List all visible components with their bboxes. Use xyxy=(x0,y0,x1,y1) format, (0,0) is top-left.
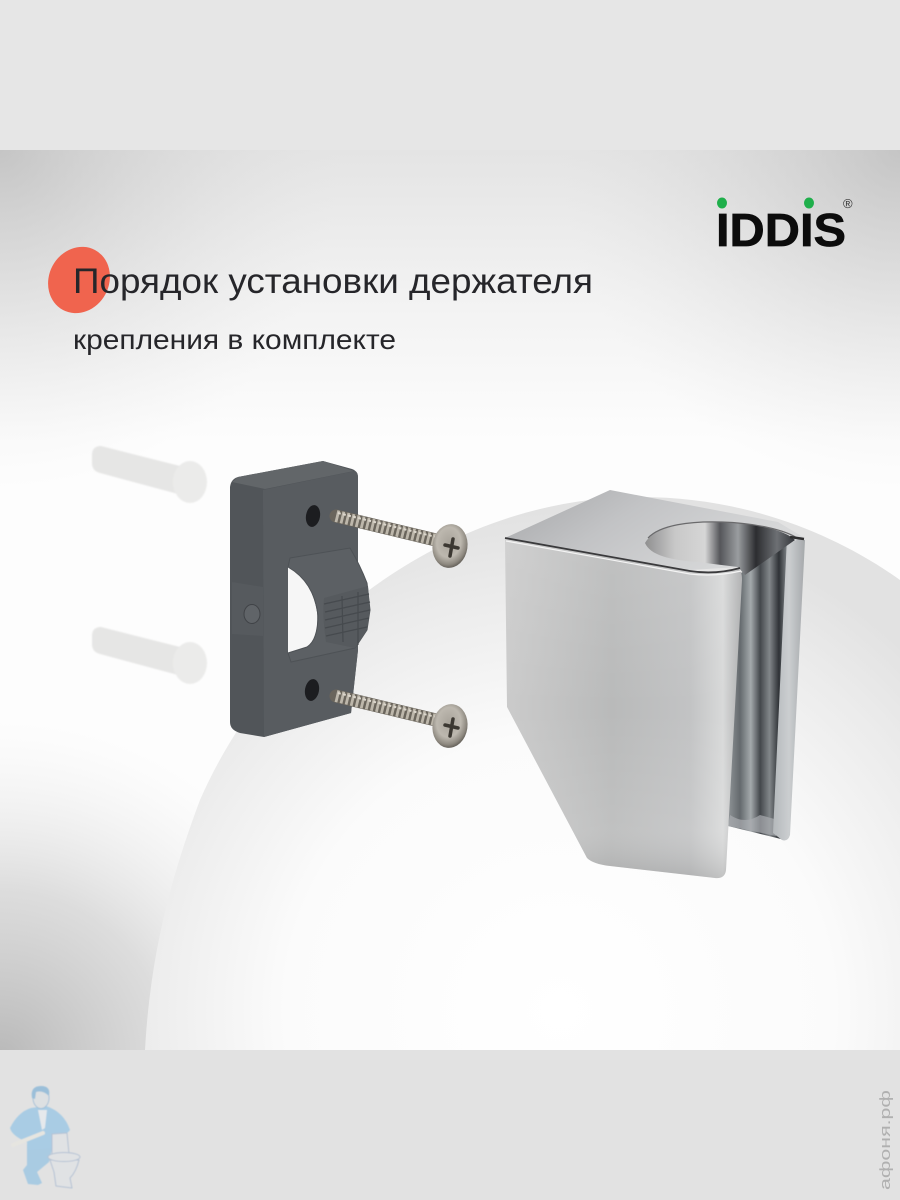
screw: upper xyxy=(336,513,470,570)
holder inner channel xyxy=(728,538,795,840)
mascot hair xyxy=(32,1086,49,1099)
logo: IDDIS: IDDIS xyxy=(716,204,846,256)
bracket clip xyxy=(288,548,370,662)
bracket front face xyxy=(263,471,358,737)
mascot shirt xyxy=(38,1110,47,1130)
wall plug: lower xyxy=(92,627,207,684)
top grey band xyxy=(0,0,900,150)
holder right strip xyxy=(773,537,805,840)
mascot wrench xyxy=(13,1133,43,1145)
mascot jacket xyxy=(10,1106,70,1150)
bracket side pin xyxy=(244,604,260,624)
mascot legs xyxy=(23,1140,54,1185)
screw: lower xyxy=(336,693,470,750)
mascot toilet xyxy=(48,1133,80,1188)
mascot: plumber with toilet xyxy=(10,1086,80,1188)
wall plug: upper xyxy=(92,446,207,503)
holder socket xyxy=(645,522,795,575)
screw hole: lower xyxy=(303,678,321,702)
chrome shower holder xyxy=(505,490,805,878)
central background panel xyxy=(0,150,900,1050)
holder front face xyxy=(505,538,742,878)
large light arc xyxy=(145,497,900,1050)
bracket top face xyxy=(232,461,354,489)
accent blob behind heading xyxy=(37,236,121,324)
subheading: крепления в комплекте xyxy=(73,324,396,355)
heading: Порядок установки держателя xyxy=(73,261,593,301)
bracket side notch xyxy=(232,582,263,636)
mascot head xyxy=(33,1088,49,1108)
holder channel bottom reflection xyxy=(728,815,778,836)
screw hole: upper xyxy=(304,504,322,528)
bottom grey band xyxy=(0,1050,900,1200)
logo green dots xyxy=(717,198,814,208)
logo registered mark: ® xyxy=(843,196,853,211)
mounting bracket xyxy=(230,461,370,737)
holder top face xyxy=(505,490,803,570)
bracket window xyxy=(288,567,317,653)
watermark: афоня.рф xyxy=(877,1090,894,1190)
holder bright rim xyxy=(505,538,740,572)
